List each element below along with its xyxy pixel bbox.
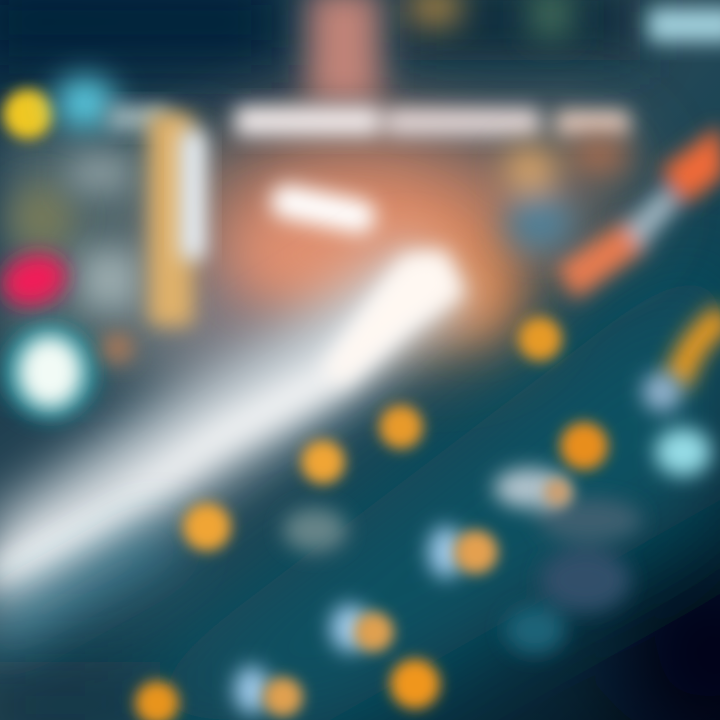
left header strip (108, 106, 168, 130)
right gold arc (678, 315, 720, 385)
left grey panel haze (0, 130, 220, 370)
vertical blue white column (180, 130, 206, 260)
cyan icon (55, 77, 115, 129)
dark top band (0, 0, 640, 65)
lower right teal field (0, 240, 720, 720)
light beam (0, 245, 480, 630)
small orange marker (102, 332, 134, 364)
top right light blue block (648, 8, 720, 42)
light blue dots (234, 372, 711, 714)
yellow circle icon (3, 89, 53, 139)
pink icon (0, 246, 73, 314)
top centre pink column (308, 0, 572, 105)
vertical yellow column (148, 112, 194, 327)
upper right blue grey cards (504, 137, 632, 252)
left text blur (70, 155, 140, 310)
central orange glow (140, 125, 630, 390)
white glowing pill (268, 182, 379, 237)
orange diagonal band (555, 125, 720, 300)
warm glow core (235, 205, 506, 333)
olive blob (10, 184, 74, 252)
beam lower shadow glow (0, 525, 190, 660)
teal ring with white core (2, 324, 98, 420)
orange dots (135, 317, 608, 720)
title text blur (235, 106, 630, 136)
